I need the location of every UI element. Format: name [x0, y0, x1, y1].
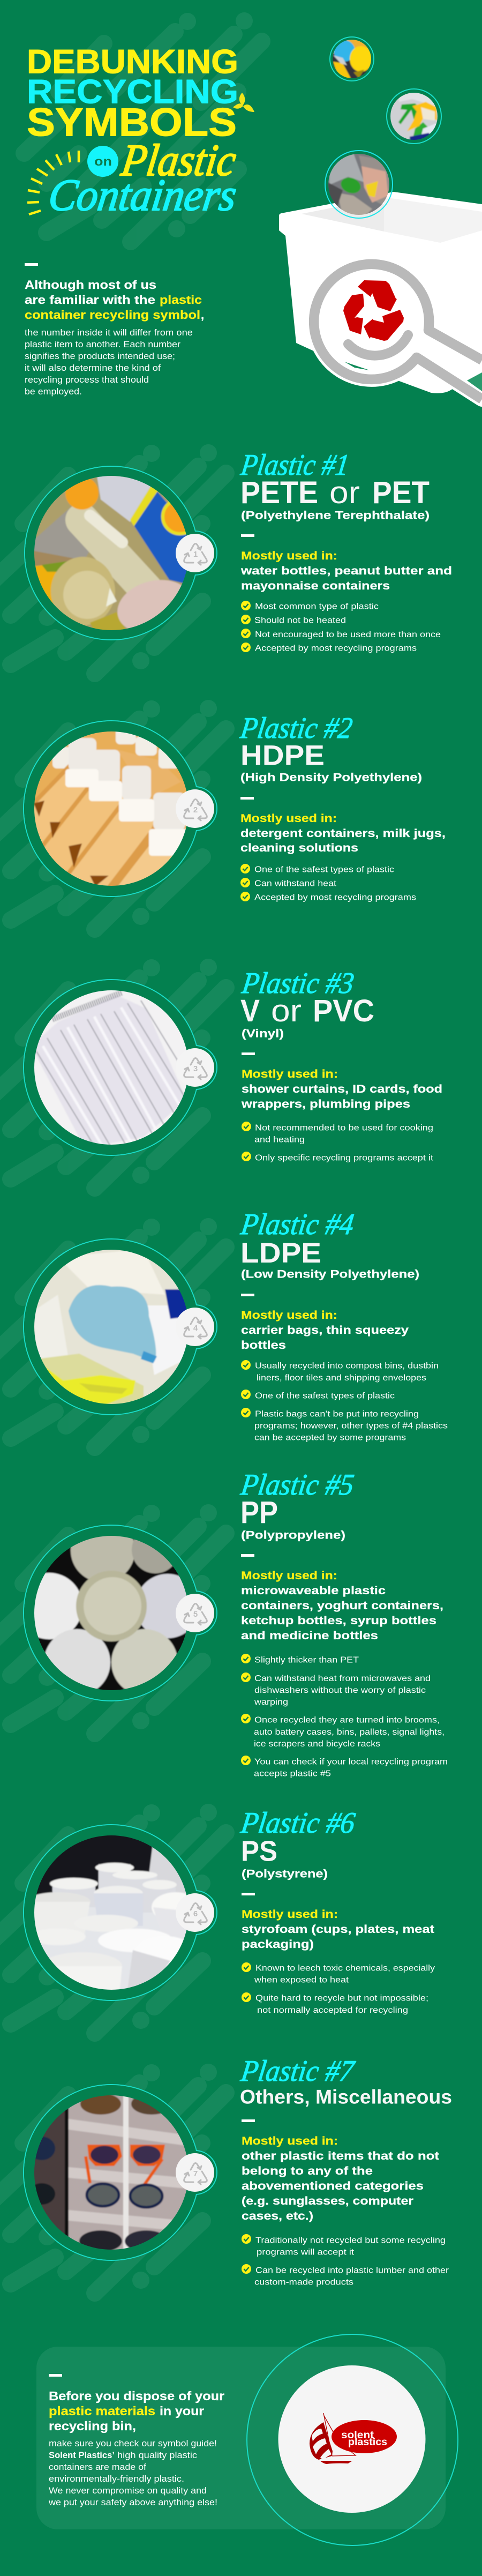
text block: uses 5: Mostly used in:: [241, 1569, 337, 1582]
text block: uses 7: belong to any of the: [242, 2164, 373, 2177]
heading: plastic 6: Plastic #6: [238, 1806, 357, 1840]
text block: intro: the number inside it will differ from one: [25, 328, 193, 338]
heading: plastic 2: Plastic #2: [238, 712, 355, 745]
icon: photo circle, gloves: [330, 37, 374, 81]
heading: plastic 6: (Polystyrene): [242, 1867, 328, 1880]
panel: plastic 6: [0, 1806, 435, 2033]
photo circle: plastic bags: [0, 1227, 226, 1447]
heading: plastic 7: Plastic #7: [238, 2055, 358, 2088]
icon: recycle badge 1: 1: [193, 550, 198, 559]
heading: plastic 4: Plastic #4: [238, 1208, 356, 1241]
title: Containers: [46, 170, 239, 220]
text block: uses 3: shower curtains, ID cards, food: [242, 1082, 442, 1095]
text block: intro: recycling process that should: [25, 375, 149, 385]
text block: intro: be employed.: [25, 387, 82, 397]
icon: recycle badge 2: 2: [193, 805, 198, 815]
heading: plastic 5: (Polypropylene): [241, 1528, 345, 1541]
icon: on badge: on: [94, 154, 112, 168]
icon: recycle badge 4: [176, 1308, 214, 1346]
list: notes 4: Usually recycled into compost bins, dustbin: [255, 1361, 439, 1371]
panel: plastic 4: [0, 1208, 448, 1447]
heading: plastic 5: Plastic #5: [238, 1468, 356, 1502]
list: notes 5: ice scrapers and bicycle racks: [254, 1739, 380, 1749]
heading: plastic 3: Plastic #3: [239, 967, 356, 1000]
text block: uses 2: Mostly used in:: [240, 812, 337, 825]
list: notes 6: when exposed to heat: [254, 1975, 349, 1985]
photo circle: styrofoam cups: [0, 1812, 226, 2033]
text block: uses 7: (e.g. sunglasses, computer: [242, 2194, 414, 2207]
text block: intro: are familiar with the: [25, 293, 155, 307]
text block: intro: ,: [201, 308, 204, 322]
list: notes 2: Accepted by most recycling programs: [254, 893, 416, 902]
icon: recycle badge 5: 5: [193, 1610, 198, 1619]
heading: plastic 2: [238, 712, 422, 783]
text block: uses 2: cleaning solutions: [240, 841, 358, 854]
logo: Solent Plastics: plastics: [348, 2437, 387, 2448]
heading: plastic 1: PET: [372, 475, 430, 510]
list: notes 1: Should not be heated: [254, 616, 346, 625]
list: notes 4: liners, floor tiles and shipping envelopes: [257, 1373, 426, 1383]
list: notes 4: Plastic bags can’t be put into recycling: [255, 1409, 419, 1419]
text block: uses 7: abovementioned categories: [242, 2179, 424, 2192]
list: notes 4: programs; however, other types of #4 plastics: [254, 1421, 448, 1431]
list: notes 7: [242, 2234, 449, 2287]
panel: header: [24, 21, 482, 399]
icon: recycle badge 6: [176, 1893, 214, 1932]
heading: plastic 3: [239, 967, 374, 1040]
list: notes 4: [241, 1360, 448, 1443]
heading: plastic 2: HDPE: [240, 740, 325, 772]
text block: uses 4: Mostly used in:: [241, 1309, 337, 1321]
heading: plastic 3: or: [271, 994, 302, 1028]
heading: plastic 1: Plastic #1: [238, 449, 351, 482]
list: notes 1: Most common type of plastic: [255, 602, 379, 611]
list: notes 7: Can be recycled into plastic lumber and other: [255, 2266, 449, 2275]
heading: plastic 7: Others, Miscellaneous: [240, 2086, 452, 2108]
text block: intro: signifies the products intended use;: [25, 352, 175, 361]
text block: intro: [25, 263, 204, 397]
list: notes 4: One of the safest types of plastic: [255, 1391, 395, 1401]
heading: plastic 1: [238, 449, 430, 522]
list: notes 6: not normally accepted for recycling: [257, 2006, 408, 2015]
text block: uses 7: other plastic items that do not: [242, 2149, 439, 2162]
text block: uses 4: carrier bags, thin squeezy: [241, 1324, 409, 1336]
text block: uses 3: wrappers, plumbing pipes: [241, 1097, 410, 1110]
heading: plastic 1: (Polyethylene Terephthalate): [241, 509, 430, 522]
heading: plastic 7: [238, 2055, 452, 2108]
text block: uses 4: bottles: [241, 1339, 286, 1352]
list: notes 3: Only specific recycling programs accept it: [255, 1153, 434, 1163]
list: notes 3: Not recommended to be used for cooking: [255, 1123, 433, 1133]
text block: uses 1: mayonnaise containers: [241, 579, 390, 592]
heading: plastic 4: [238, 1208, 419, 1281]
text block: closing: [48, 2374, 224, 2507]
list: notes 5: warping: [254, 1698, 288, 1707]
text block: closing: environmentally-friendly plastic.: [49, 2474, 184, 2484]
text block: uses 5: [241, 1554, 443, 1642]
text block: intro: container recycling symbol: [25, 308, 200, 322]
icon: recycle badge 4: 4: [193, 1324, 198, 1333]
text block: uses 5: and medicine bottles: [241, 1629, 378, 1642]
list: notes 3: [242, 1122, 434, 1163]
text block: intro: plastic: [160, 293, 202, 307]
panel: plastic 7: [0, 2055, 452, 2293]
list: notes 5: Slightly thicker than PET: [254, 1656, 359, 1664]
text block: uses 3: Mostly used in:: [242, 1067, 338, 1080]
text block: closing: We never compromise on quality and: [49, 2485, 207, 2496]
text block: uses 2: detergent containers, milk jugs,: [240, 827, 446, 840]
icon: magnifier: [314, 264, 482, 399]
list: notes 5: dishwashers without the worry of plastic: [254, 1686, 426, 1695]
title: SYMBOLS: [27, 100, 237, 145]
icon: recycle badge 3: 3: [193, 1064, 198, 1073]
logo: Solent Plastics: [310, 2413, 397, 2464]
panel: plastic 5: [0, 1468, 448, 1778]
heading: plastic 3: (Vinyl): [242, 1027, 284, 1040]
text block: uses 5: containers, yoghurt containers,: [241, 1599, 443, 1612]
text block: intro: Although most of us: [25, 278, 156, 292]
panel: plastic 2: [0, 708, 446, 929]
text block: closing: Before you dispose of your: [49, 2389, 224, 2403]
list: notes 5: Can withstand heat from microwaves and: [254, 1674, 431, 1683]
text block: uses 6: Mostly used in:: [242, 1908, 338, 1921]
icon: recycle badge 1: [176, 534, 214, 572]
list: notes 2: One of the safest types of plastic: [254, 865, 394, 875]
text block: uses 6: styrofoam (cups, plates, meat: [242, 1923, 434, 1936]
title: DEBUNKING: [27, 43, 238, 80]
list: notes 1: Not encouraged to be used more than once: [255, 630, 441, 639]
heading: plastic 3: PVC: [313, 994, 374, 1028]
text block: uses 5: microwaveable plastic: [241, 1584, 386, 1597]
text block: uses 5: ketchup bottles, syrup bottles: [241, 1614, 436, 1627]
logo ring: [247, 2334, 458, 2545]
heading: plastic 2: (High Density Polyethylene): [240, 771, 422, 783]
text block: closing: make sure you check our symbol guide!: [49, 2438, 217, 2448]
text block: closing: high quality plastic: [117, 2450, 198, 2460]
text block: uses 4: [241, 1294, 409, 1352]
title: RECYCLING: [27, 73, 238, 110]
icon: recycle badge 7: [176, 2153, 214, 2192]
text block: closing: in your: [160, 2404, 204, 2418]
text block: uses 7: [242, 2119, 439, 2222]
icon: recycle badge 3: [176, 1048, 214, 1087]
text block: uses 7: cases, etc.): [242, 2209, 313, 2222]
text block: uses 2: [240, 797, 446, 854]
text block: intro: plastic item to another. Each number: [25, 340, 181, 349]
heading: plastic 4: LDPE: [240, 1237, 321, 1269]
text block: intro: it will also determine the kind of: [25, 363, 161, 373]
list: notes 7: custom-made products: [254, 2278, 353, 2287]
icon: title rays: [27, 151, 79, 214]
list: notes 7: programs will accept it: [257, 2248, 355, 2257]
heading: plastic 5: [238, 1468, 356, 1541]
icon: photo circle, spray bottle: [387, 89, 441, 144]
panel: plastic 3: [0, 967, 442, 1188]
list: notes 1: [241, 601, 441, 653]
text block: uses 1: water bottles, peanut butter and: [240, 564, 452, 577]
heading: plastic 1: PETE: [240, 475, 318, 510]
text block: uses 7: Mostly used in:: [242, 2134, 338, 2147]
icon: on badge: [87, 146, 118, 177]
icon: bin: [279, 192, 482, 399]
title: [27, 43, 239, 220]
list: notes 2: Can withstand heat: [254, 879, 337, 888]
list: notes 7: Traditionally not recycled but some recycling: [255, 2236, 446, 2245]
panel: closing callout: [36, 2334, 458, 2545]
list: notes 5: [241, 1654, 448, 1778]
logo: Solent Plastics: solent: [341, 2430, 374, 2441]
heading: plastic 6: [238, 1806, 357, 1880]
icon: recycle badge 7: 7: [193, 2169, 198, 2178]
list: notes 6: Known to leech toxic chemicals, especially: [255, 1963, 435, 1973]
icon: leaves: [233, 93, 254, 112]
photo circle: sunglasses: [0, 2072, 226, 2293]
list: notes 5: accepts plastic #5: [254, 1769, 331, 1778]
text block: uses 1: Mostly used in:: [241, 549, 337, 562]
title: Plastic: [118, 136, 239, 185]
icon: photo circle, plastic waste: [325, 151, 393, 218]
icon: recycle badge 5: [176, 1594, 214, 1632]
text block: closing: we put your safety above anything else!: [48, 2497, 217, 2507]
list: notes 3: and heating: [254, 1135, 305, 1145]
photo circle: plastic bottles: [0, 453, 226, 674]
list: notes 6: Quite hard to recycle but not impossible;: [255, 1993, 428, 2003]
text block: uses 6: packaging): [242, 1938, 314, 1951]
photo circle: vinyl sheets: [0, 967, 226, 1188]
text block: closing: plastic materials: [49, 2404, 155, 2418]
heading: plastic 1: or: [329, 475, 360, 510]
logo disc: [278, 2365, 425, 2513]
icon: recycle symbol: [343, 280, 404, 341]
list: notes 2: [240, 864, 416, 902]
icon: recycle badge 2: [176, 789, 214, 828]
list: notes 6: [242, 1962, 435, 2015]
list: notes 4: can be accepted by some programs: [254, 1433, 406, 1443]
heading: plastic 6: PS: [241, 1835, 277, 1867]
text block: uses 6: [242, 1893, 434, 1951]
photo circle: detergent bottles: [0, 708, 226, 929]
list: notes 5: Once recycled they are turned into brooms,: [254, 1716, 440, 1724]
heading: plastic 3: V: [240, 994, 260, 1028]
list: notes 1: Accepted by most recycling programs: [255, 644, 417, 653]
panel: plastic 1: [0, 449, 452, 674]
text block: closing: containers are made of: [49, 2462, 146, 2472]
text block: closing: recycling bin,: [49, 2419, 136, 2433]
photo circle: bottle caps: [0, 1513, 226, 1734]
list: notes 5: auto battery cases, bins, pallets, signal lights,: [254, 1728, 445, 1737]
heading: plastic 5: PP: [240, 1495, 278, 1530]
list: notes 5: You can check if your local recycling program: [254, 1758, 448, 1766]
text block: uses 3: [241, 1052, 442, 1110]
heading: plastic 4: (Low Density Polyethylene): [241, 1268, 419, 1281]
text block: closing: Solent Plastics’: [49, 2450, 115, 2460]
icon: recycle badge 6: 6: [193, 1909, 198, 1918]
text block: uses 1: [240, 534, 452, 592]
